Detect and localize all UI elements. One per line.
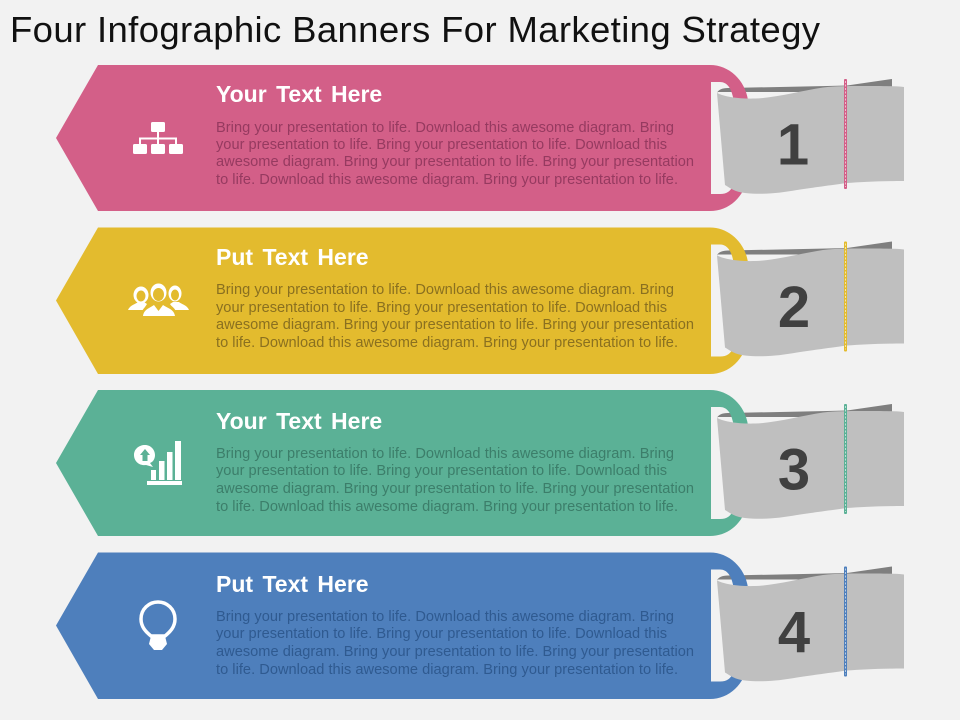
banner shape 3	[56, 390, 748, 536]
heading 1: Your Text Here	[216, 81, 382, 107]
number 2: 2	[778, 275, 810, 340]
number 4: 4	[778, 600, 810, 665]
body text 1: your presentation to life. Bring your presentation to life. Download this	[216, 137, 667, 153]
ribbon 2	[717, 242, 904, 356]
ribbon strip	[844, 566, 847, 676]
heading 2: Put Text Here	[216, 244, 369, 270]
icon: growth chart with bubble	[134, 441, 182, 485]
ribbon back 4	[717, 566, 892, 580]
ribbon back 3	[717, 404, 892, 418]
body text 3: to life. Download this awesome diagram. Bring your presentation to life.	[216, 499, 678, 515]
banner shape 4	[56, 552, 748, 699]
body text 3: awesome diagram. Bring your presentation to life. Bring your presentation	[216, 481, 694, 497]
icon: light bulb	[141, 602, 175, 650]
body text 3: Bring your presentation to life. Download this awesome diagram. Bring	[216, 446, 674, 462]
body text 4: Bring your presentation to life. Download this awesome diagram. Bring	[216, 609, 674, 625]
body text 2: to life. Download this awesome diagram. Bring your presentation to life.	[216, 335, 678, 351]
body text 2: awesome diagram. Bring your presentation to life. Bring your presentation	[216, 317, 694, 333]
ribbon strip	[844, 404, 847, 514]
body text 1: to life. Download this awesome diagram. Bring your presentation to life.	[216, 172, 678, 188]
banner shape 2	[56, 228, 748, 374]
heading 4: Put Text Here	[216, 571, 369, 597]
ribbon strip	[844, 79, 847, 189]
body text 4	[216, 609, 694, 678]
ribbon 4	[717, 566, 904, 681]
panel: banner 2	[56, 228, 904, 374]
body text 1: Bring your presentation to life. Download this awesome diagram. Bring	[216, 120, 674, 136]
ribbon back 2	[717, 242, 892, 256]
number 3: 3	[778, 438, 810, 502]
body text 3: your presentation to life. Bring your presentation to life. Download this	[216, 463, 667, 479]
title: Four Infographic Banners For Marketing Strategy	[10, 9, 821, 50]
ribbon 1	[717, 79, 904, 194]
body text 2: your presentation to life. Bring your presentation to life. Download this	[216, 300, 667, 316]
panel: banner 4	[56, 552, 904, 699]
body text 1: awesome diagram. Bring your presentation to life. Bring your presentation	[216, 154, 694, 170]
heading 3: Your Text Here	[216, 408, 382, 434]
ribbon strip	[844, 242, 847, 352]
body text 3	[216, 446, 694, 515]
body text 4: awesome diagram. Bring your presentation to life. Bring your presentation	[216, 644, 694, 660]
body text 2: Bring your presentation to life. Download this awesome diagram. Bring	[216, 282, 674, 298]
ribbon back 1	[717, 79, 892, 93]
panel: banner 1	[56, 65, 904, 211]
body text 4: your presentation to life. Bring your presentation to life. Download this	[216, 626, 667, 642]
body text 1	[216, 120, 694, 188]
ribbon 3	[717, 404, 904, 519]
icon: org chart	[133, 122, 183, 154]
number 1: 1	[777, 112, 809, 178]
body text 4: to life. Download this awesome diagram. Bring your presentation to life.	[216, 662, 678, 678]
banner shape 1	[56, 65, 748, 211]
icon: team of people	[128, 282, 189, 317]
body text 2	[216, 282, 694, 351]
panel: banner 3	[56, 390, 904, 536]
